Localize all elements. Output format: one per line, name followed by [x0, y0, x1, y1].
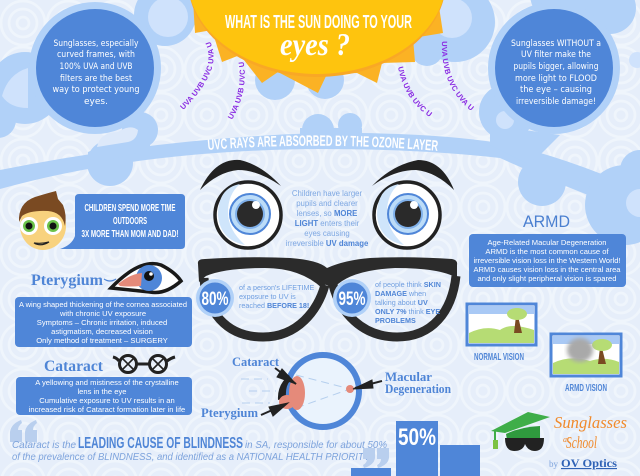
panel: pterygium description: [15, 297, 192, 347]
statement text: of the prevalence of BLINDNESS, and identified as a NATIONAL HEALTH PRIORITY: [12, 451, 371, 463]
text: children larger pupils: irreversible UV damage: [286, 239, 369, 248]
right lens rim: [333, 276, 456, 337]
label: Pterygium: Pterygium: [201, 406, 259, 420]
title script word: eyes ?: [280, 26, 350, 62]
label: Cataract: Cataract: [232, 355, 280, 369]
pterygium growth: [279, 395, 295, 409]
panel: no UV filter warning: more light to FLOOD: [515, 74, 597, 84]
glasses: [198, 257, 457, 337]
panel: ARMD description: Age-Related Macular Degeneration: [487, 238, 607, 247]
panel: no UV filter warning: Sunglasses WITHOUT a: [511, 39, 601, 49]
panel: sunglasses advice: eyes.: [84, 97, 108, 107]
speech bubble: children outdoors: 3X MORE THAN MOM AND DAD!: [82, 228, 178, 240]
stat text: 95%: talking about UV: [375, 298, 428, 307]
left eye: [215, 182, 281, 248]
icon: opening quote mark: [10, 420, 37, 442]
panel: pterygium description: Only method of treatment – SURGERY: [36, 336, 168, 345]
panel: cataract description: lens in the eye: [78, 387, 126, 396]
panel: cataract description: [16, 377, 192, 415]
cornea: [278, 375, 291, 400]
stat text: 95%: DAMAGE when: [375, 289, 426, 298]
speech bubble: children outdoors: [60, 194, 185, 249]
label: normal vision: NORMAL VISION: [474, 352, 524, 363]
clouds and ribbon: [0, 0, 640, 245]
panel: pterygium description: with chronic UV exposure: [59, 309, 146, 318]
speech bubble: children outdoors: OUTDOORS: [113, 215, 147, 227]
arrows: [261, 368, 382, 416]
heading: ARMD: ARMD: [523, 212, 570, 231]
panel: pterygium description: astigmatism, decreased vision: [51, 327, 153, 336]
statement text: in SA, responsible for about 50%: [245, 439, 387, 451]
statement text: LEADING CAUSE OF BLINDNESS: [78, 435, 243, 452]
right eyebrow: [372, 160, 454, 190]
sun rays: [193, 0, 443, 93]
UV rays lettering: [180, 42, 474, 119]
macula: [346, 385, 354, 393]
speech bubble: children outdoors: CHILDREN SPEND MORE TIME: [84, 202, 176, 214]
stat text: 95%: ONLY 7% think EYE: [375, 307, 440, 316]
stat: 80%: [196, 279, 234, 317]
logo: Sunglasses at School: [491, 412, 627, 470]
bar chart: blindness share: 50%: [398, 424, 436, 451]
panel: no UV filter warning: irreversible damage!: [516, 97, 596, 107]
stat text: 80%: of a person's LIFETIME: [239, 283, 314, 292]
heading: Pterygium: Pterygium: [31, 272, 104, 289]
label: Macular Degeneration: Degeneration: [385, 382, 451, 396]
panel: pterygium description: A wing shaped thickening of the cornea associated: [19, 300, 187, 309]
stat: 95%: 95%: [338, 289, 366, 310]
panel: pterygium description: Symptoms – Chronic irritation, induced: [37, 318, 167, 327]
sun: [188, 0, 446, 93]
icon: boy face: [19, 191, 66, 250]
bar chart: blindness share: [351, 421, 480, 476]
icon: closing quote mark: [363, 448, 389, 468]
panel: sunglasses advice: Sunglasses, especially: [54, 39, 139, 49]
statement text: Cataract is the: [12, 439, 76, 451]
logo: Sunglasses at School: at: [563, 435, 570, 444]
illustration: normal vision: [467, 304, 536, 345]
ribbon heading: UVC RAYS ARE ABSORBED BY THE OZONE LAYER: [208, 135, 438, 151]
glasses top bar: [198, 257, 457, 292]
icon: crossed glasses: [113, 356, 175, 372]
heading: Cataract: Cataract: [44, 358, 104, 375]
panel: sunglasses advice: filters are the best: [60, 74, 132, 84]
sun disc: [188, 0, 446, 77]
panel: no UV filter warning: [488, 2, 620, 134]
icon: pterygium eye: [104, 264, 181, 293]
left lens rim: [204, 278, 325, 337]
label: Macular Degeneration: Macular: [385, 370, 432, 384]
ribbon band: [0, 133, 640, 215]
central blur: [567, 338, 593, 362]
statement text: [12, 435, 387, 463]
panel: cataract description: A yellowing and mistiness of the crystalline: [35, 378, 179, 387]
stat text: 80%: reached BEFORE 18!: [239, 301, 309, 310]
eyes illustration: [200, 160, 454, 248]
cloud highlights: [2, 0, 640, 217]
stat text: 95%: PROBLEMS: [375, 316, 416, 325]
title: WHAT IS THE SUN DOING TO YOUR: [225, 12, 412, 32]
panel: ARMD description: ARMD causes vision loss in the central area: [474, 265, 621, 274]
text: children larger pupils: eyes causing: [304, 229, 350, 238]
stat text: 80%: [239, 283, 314, 310]
stat: 95%: [333, 279, 371, 317]
panel: ARMD description: and only slight peripheral vision is spared: [478, 274, 616, 283]
logo: Sunglasses at School: by: [549, 459, 558, 469]
logo: Sunglasses at School: School: [566, 433, 597, 452]
panel: ARMD description: irreversible vision loss in the Western World!: [474, 256, 620, 265]
panel: sunglasses advice: curved frames, with: [57, 50, 135, 60]
logo: Sunglasses at School: Sunglasses: [554, 413, 627, 432]
text: children larger pupils: [286, 189, 369, 248]
right eye: [374, 182, 440, 248]
logo: Sunglasses at School: OV Optics: [561, 458, 618, 470]
stat: 80%: 80%: [202, 289, 229, 310]
text: children larger pupils: LIGHT enters their: [295, 219, 360, 228]
panel: cataract description: increased risk of Cataract formation later in life: [29, 405, 185, 414]
panel: ARMD description: ARMD is the most common cause of: [485, 247, 610, 256]
lens: [289, 376, 305, 410]
panel: sunglasses advice: [29, 2, 161, 134]
panel: sunglasses advice: way to protect young: [52, 85, 140, 95]
panel: no UV filter warning: UV filter make the: [521, 50, 591, 60]
panel: no UV filter warning: pupils bigger, allowing: [514, 62, 598, 72]
panel: no UV filter warning: the eye – causing: [520, 85, 592, 95]
diagram: eye cross-section: [241, 355, 382, 427]
text: children larger pupils: pupils and clearer: [296, 199, 358, 208]
illustration: ARMD vision: [551, 334, 621, 376]
graduation cap: [491, 412, 550, 449]
stat text: 95%: of people think SKIN: [375, 280, 441, 289]
text: children larger pupils: lenses, so MORE: [297, 209, 357, 218]
label: Macular Degeneration: [385, 370, 451, 396]
left eyebrow: [200, 160, 281, 190]
label: ARMD vision: ARMD VISION: [565, 383, 607, 394]
panel: cataract description: Cumulative exposure to UV results in an: [39, 396, 175, 405]
logo sunglasses: [505, 438, 544, 451]
stat text: 95%: [375, 280, 441, 325]
text: children larger pupils: Children have larger: [292, 189, 363, 198]
panel: ARMD description: [469, 234, 626, 287]
stat text: 80%: exposure to UV is: [239, 292, 296, 301]
panel: sunglasses advice: 100% UVA and UVB: [60, 62, 132, 72]
